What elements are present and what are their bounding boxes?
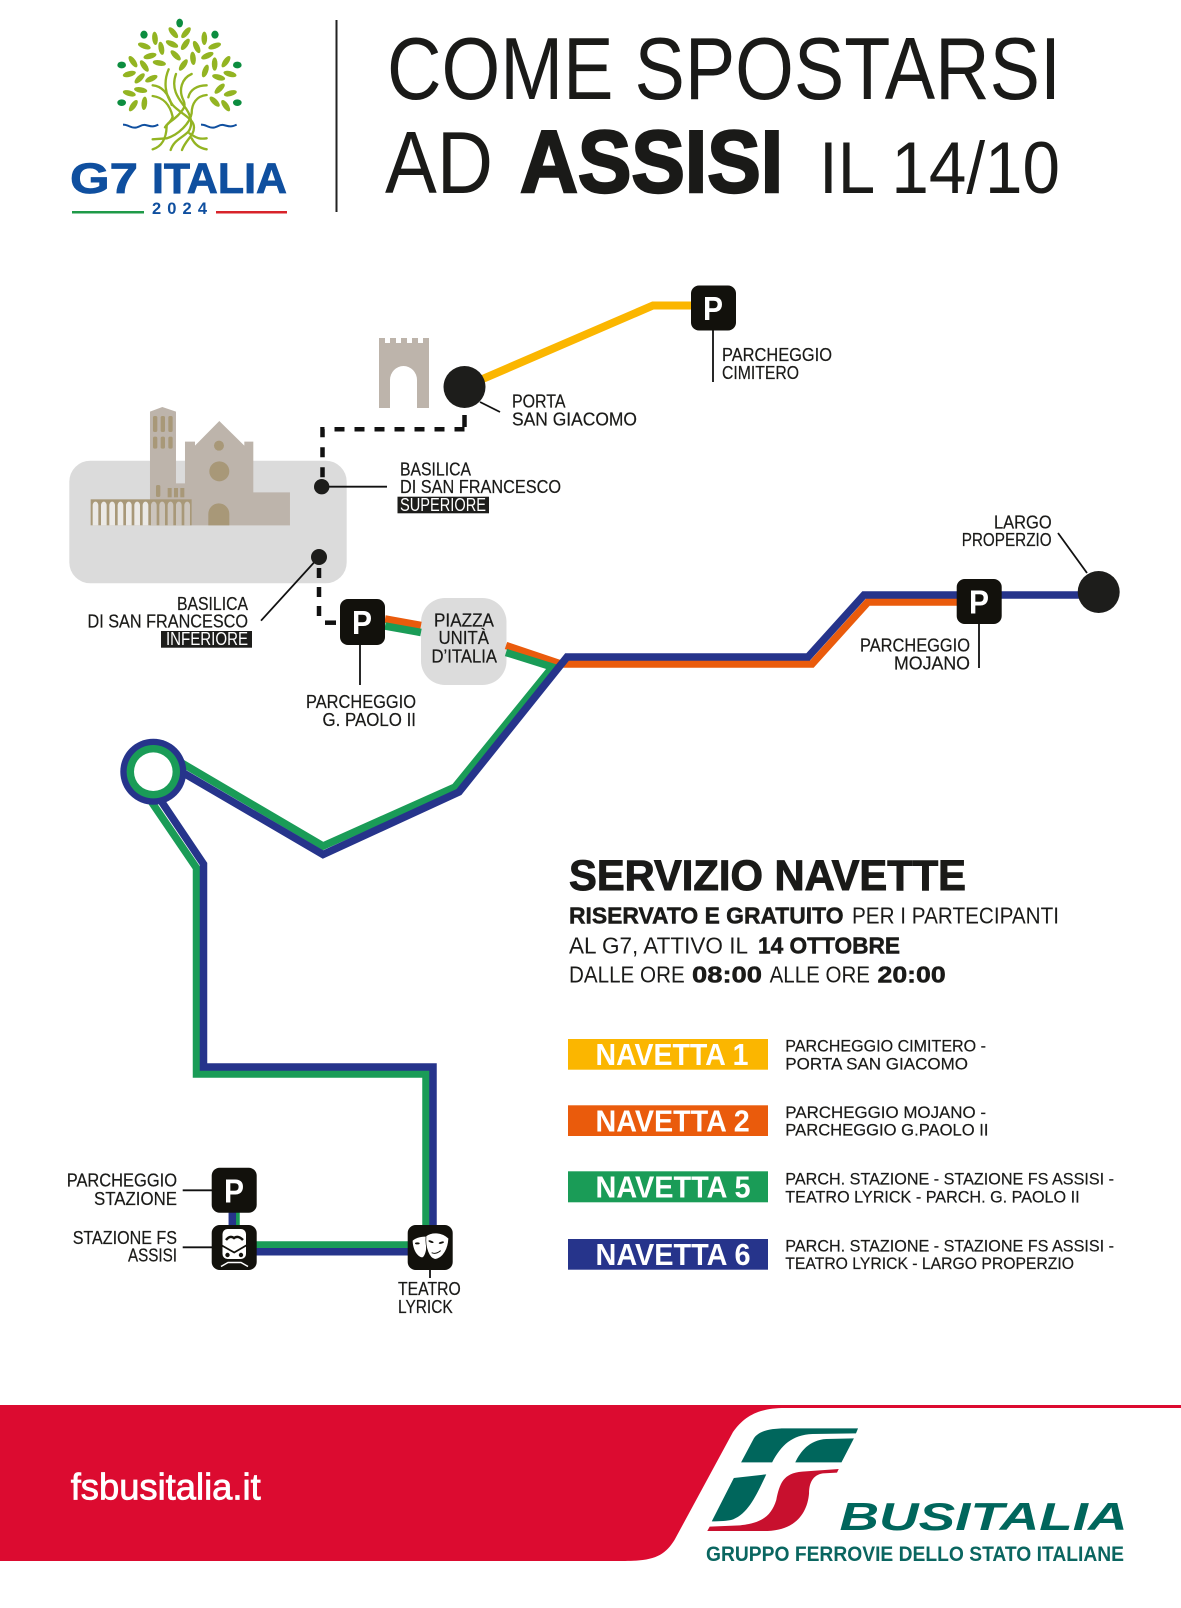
panel: piazza unita d'italia: D’ITALIA xyxy=(432,647,497,667)
text block: servizio navette: PER I PARTECIPANTI xyxy=(852,902,1059,928)
logo: fs busitalia: BUSITALIA xyxy=(840,1496,1128,1539)
legend: navetta 2: PARCHEGGIO G.PAOLO II xyxy=(785,1121,988,1140)
title xyxy=(385,19,1061,212)
panel: basilica area xyxy=(69,461,347,583)
route: navetta 5 green xyxy=(140,626,552,1245)
stop: basilica superiore: SUPERIORE xyxy=(400,495,486,515)
stop: basilica superiore: BASILICA xyxy=(400,460,471,480)
stop: parcheggio g. paolo ii: P xyxy=(352,604,372,641)
text block: servizio navette: 20:00 xyxy=(878,962,946,988)
stop: parcheggio stazione: P xyxy=(224,1173,244,1210)
legend: navetta 1: PARCHEGGIO CIMITERO - xyxy=(785,1037,986,1056)
logo: G7 Italia 2024: G7 xyxy=(70,155,138,203)
stop: largo properzio: PROPERZIO xyxy=(962,530,1052,550)
stop: parcheggio stazione: STAZIONE xyxy=(94,1189,177,1209)
stop: teatro lyrick: TEATRO xyxy=(398,1279,461,1299)
footer: red band xyxy=(0,1405,1181,1561)
legend: navetta 1: PORTA SAN GIACOMO xyxy=(785,1054,968,1073)
route: navetta 6 blue xyxy=(147,595,1100,1252)
stop: basilica superiore: DI SAN FRANCESCO xyxy=(400,477,561,497)
stop: porta san giacomo: SAN GIACOMO xyxy=(512,410,637,430)
title: IL 14/10 xyxy=(819,128,1060,209)
legend: navetta 6: TEATRO LYRICK - LARGO PROPERZIO xyxy=(785,1254,1074,1273)
legend: navetta 5: PARCH. STAZIONE - STAZIONE FS ASSISI - xyxy=(785,1169,1114,1188)
title: AD xyxy=(385,113,493,212)
text block: servizio navette: ALLE ORE xyxy=(770,962,870,988)
text block: servizio navette: 08:00 xyxy=(692,962,762,988)
text block: servizio navette: AL G7, ATTIVO IL xyxy=(569,932,748,958)
stop: parcheggio cimitero xyxy=(691,286,832,383)
logo: fs busitalia: GRUPPO FERROVIE DELLO STATO ITALIANE xyxy=(706,1543,1124,1566)
icon: olive tree xyxy=(117,19,242,150)
legend: navetta 5 xyxy=(568,1169,1114,1206)
panel: piazza unita d'italia: PIAZZA xyxy=(434,611,494,631)
text block: servizio navette: 14 OTTOBRE xyxy=(758,932,900,958)
stop: parcheggio mojano: MOJANO xyxy=(894,653,970,673)
stop: porta san giacomo: PORTA xyxy=(512,392,566,412)
node: ring junction xyxy=(120,739,186,805)
stop: basilica inferiore: BASILICA xyxy=(177,594,248,614)
footer: red band: fsbusitalia.it xyxy=(71,1466,261,1507)
logo: G7 Italia 2024: 2024 xyxy=(152,200,208,218)
legend: navetta 5: NAVETTA 5 xyxy=(596,1171,751,1205)
logo: fs busitalia xyxy=(706,1428,1128,1566)
stop: parcheggio g. paolo ii: G. PAOLO II xyxy=(322,710,416,730)
icon: fs mark xyxy=(707,1428,858,1531)
title: ASSISI xyxy=(520,112,783,211)
stop: parcheggio g. paolo ii: PARCHEGGIO xyxy=(306,692,416,712)
legend: navetta 6: PARCH. STAZIONE - STAZIONE FS ASSISI - xyxy=(785,1237,1114,1256)
logo: G7 Italia 2024 xyxy=(70,19,287,218)
stop: parcheggio stazione xyxy=(67,1168,257,1213)
legend: navetta 2: PARCHEGGIO MOJANO - xyxy=(785,1103,986,1122)
stop: basilica inferiore xyxy=(88,549,327,649)
stop: basilica superiore xyxy=(314,460,561,515)
stop: largo properzio: LARGO xyxy=(994,512,1052,532)
logo: G7 Italia 2024: ITALIA xyxy=(152,155,287,203)
legend: navetta 6 xyxy=(568,1237,1114,1273)
legend: navetta 2 xyxy=(568,1103,988,1140)
text block: servizio navette: RISERVATO E GRATUITO xyxy=(569,902,844,928)
stop: stazione fs assisi: ASSISI xyxy=(128,1246,177,1266)
route: navetta 1 yellow xyxy=(464,306,700,387)
icon: porta san giacomo gate xyxy=(379,338,429,408)
stop: parcheggio stazione: PARCHEGGIO xyxy=(67,1171,177,1191)
stop: parcheggio mojano: PARCHEGGIO xyxy=(860,636,970,656)
route: navetta 2 orange xyxy=(385,602,957,664)
legend: navetta 2: NAVETTA 2 xyxy=(596,1105,750,1139)
stop: teatro lyrick: LYRICK xyxy=(398,1297,453,1317)
icon: train xyxy=(221,1229,248,1266)
title: COME SPOSTARSI xyxy=(387,19,1061,118)
legend: navetta 1 xyxy=(568,1037,986,1073)
text block: servizio navette: DALLE ORE xyxy=(569,962,685,988)
legend: navetta 1: NAVETTA 1 xyxy=(596,1038,749,1072)
route: dashed walking path xyxy=(319,415,464,623)
stop: parcheggio cimitero: PARCHEGGIO xyxy=(722,345,832,365)
text block: servizio navette xyxy=(569,852,1059,988)
text block: servizio navette: SERVIZIO NAVETTE xyxy=(569,852,966,900)
stop: parcheggio mojano xyxy=(860,579,1002,673)
divider xyxy=(336,20,338,212)
stop: parcheggio cimitero: P xyxy=(703,290,723,327)
stop: stazione fs assisi xyxy=(73,1225,257,1270)
stop: teatro lyrick xyxy=(398,1225,461,1317)
stop: basilica inferiore: INFERIORE xyxy=(166,629,248,649)
stop: stazione fs assisi: STAZIONE FS xyxy=(73,1228,177,1248)
icon: basilica di san francesco xyxy=(91,407,290,525)
stop: parcheggio g. paolo ii xyxy=(306,599,416,730)
icon: theatre masks xyxy=(413,1233,449,1259)
stop: basilica inferiore: DI SAN FRANCESCO xyxy=(88,611,248,631)
panel: piazza unita d'italia: UNITÀ xyxy=(438,628,489,648)
legend: navetta 5: TEATRO LYRICK - PARCH. G. PAOLO II xyxy=(785,1187,1080,1206)
panel: piazza unita d'italia xyxy=(421,598,506,685)
stop: parcheggio mojano: P xyxy=(969,584,989,620)
legend: navetta 6: NAVETTA 6 xyxy=(596,1238,750,1272)
stop: largo properzio xyxy=(962,512,1120,613)
stop: porta san giacomo xyxy=(444,366,637,430)
stop: parcheggio cimitero: CIMITERO xyxy=(722,363,799,383)
